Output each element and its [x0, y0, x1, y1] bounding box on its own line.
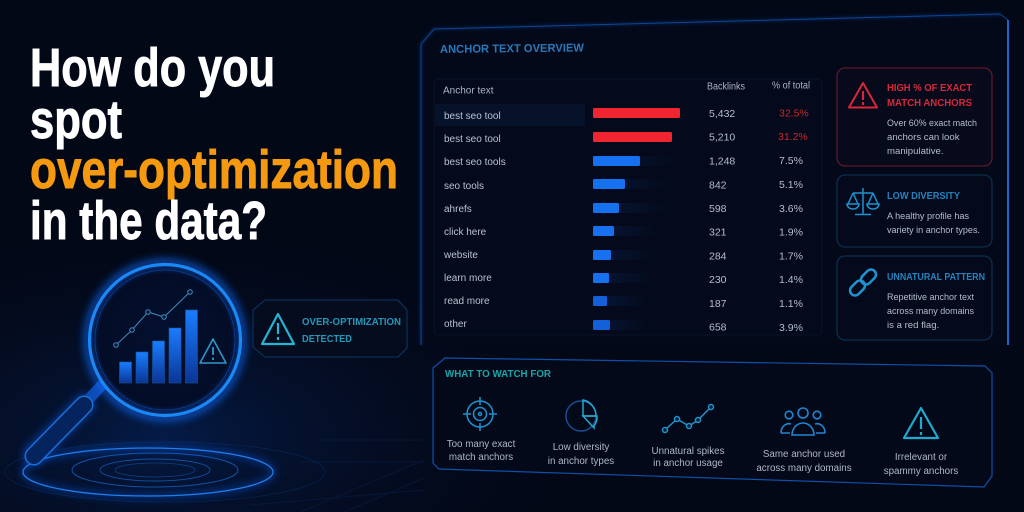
callout: over-optimization detected [253, 300, 407, 357]
percent column: 1.7% [779, 250, 803, 262]
card: high percent of exact match anchors: Over 60% exact match [887, 118, 977, 129]
callout: over-optimization detected: OVER-OPTIMIZATION [302, 316, 401, 328]
table header [443, 80, 810, 96]
item: irrelevant or spammy anchors: Irrelevant or [895, 452, 948, 463]
backlinks column: 658 [709, 322, 727, 334]
backlinks column: 321 [709, 226, 727, 238]
item: low diversity in anchor types [548, 400, 614, 467]
lens warning icon [200, 339, 226, 363]
lens trend line [114, 290, 192, 347]
item: low diversity in anchor types: in anchor types [548, 456, 614, 467]
icon: concentric floor rings [5, 442, 325, 502]
item: irrelevant or spammy anchors [884, 408, 958, 477]
card: unnatural pattern [837, 256, 992, 340]
lens bar chart [120, 310, 198, 383]
card: unnatural pattern: across many domains [887, 306, 974, 317]
card: low diversity: A healthy profile has [887, 211, 969, 222]
card: unnatural pattern: UNNATURAL PATTERN [887, 271, 985, 283]
percent column: 7.5% [779, 155, 803, 167]
item: unnatural spikes in anchor usage [652, 404, 725, 469]
icon: trend line [662, 404, 714, 432]
card: high percent of exact match anchors [837, 68, 992, 166]
item: too many exact match anchors: Too many exact [447, 439, 516, 450]
anchor labels: best seo tool [444, 134, 501, 145]
panel: what to watch for [433, 358, 992, 487]
backlinks column: 284 [709, 250, 727, 262]
card: low diversity [837, 175, 992, 247]
callout: over-optimization detected: DETECTED [302, 333, 352, 345]
percent column: 1.9% [779, 226, 803, 238]
heading: anchor text overview: ANCHOR TEXT OVERVIEW [440, 42, 584, 56]
card: high percent of exact match anchors: MATCH ANCHORS [887, 97, 972, 109]
icon: warning [904, 408, 938, 438]
percent column [778, 108, 809, 334]
title: over-optimization [30, 140, 398, 200]
anchor labels: ahrefs [444, 204, 472, 215]
bar chart [593, 108, 680, 330]
card: high percent of exact match anchors: HIGH % OF EXACT [887, 82, 973, 94]
item: unnatural spikes in anchor usage: in anchor usage [653, 458, 723, 469]
percent column: 3.6% [779, 203, 803, 215]
icon: people [781, 408, 825, 435]
handle [33, 384, 103, 456]
icon: pie chart [566, 400, 597, 431]
anchor labels: other [444, 319, 467, 330]
title [30, 38, 398, 251]
percent column: 5.1% [779, 179, 803, 191]
item: too many exact match anchors [447, 397, 516, 463]
backlinks column: 187 [709, 298, 727, 310]
panel: anchor table [434, 79, 822, 335]
anchor labels [443, 111, 506, 330]
item: same anchor used across many domains: Same anchor used [763, 449, 845, 460]
item: same anchor used across many domains [756, 408, 852, 474]
item: too many exact match anchors: match anchors [449, 452, 513, 463]
anchor labels: website [443, 250, 478, 261]
backlinks column: 5,210 [709, 132, 735, 144]
card: unnatural pattern: is a red flag. [887, 320, 939, 331]
backlinks column: 842 [709, 180, 727, 192]
title: in the data? [30, 191, 267, 251]
backlinks column [709, 108, 735, 334]
item: low diversity in anchor types: Low diversity [553, 442, 609, 453]
backlinks column: 5,432 [709, 108, 735, 120]
icon: red warning [849, 83, 877, 108]
heading: what to watch for: WHAT TO WATCH FOR [445, 368, 551, 380]
card: high percent of exact match anchors: anchors can look [887, 132, 960, 143]
lens [87, 262, 243, 418]
item: irrelevant or spammy anchors: spammy anchors [884, 466, 958, 477]
backlinks column: 1,248 [709, 156, 735, 168]
percent column: 1.1% [779, 298, 803, 310]
icon: chain link [848, 267, 878, 298]
title: spot [30, 90, 122, 150]
card: unnatural pattern: Repetitive anchor text [887, 292, 974, 303]
anchor labels: best seo tool [444, 111, 501, 122]
percent column: 32.5% [779, 108, 809, 120]
card: low diversity: variety in anchor types. [887, 225, 980, 236]
icon: target [463, 397, 497, 431]
icon: magnifying glass with chart [33, 262, 243, 456]
anchor labels: click here [444, 227, 487, 238]
item: unnatural spikes in anchor usage: Unnatural spikes [652, 446, 725, 457]
anchor labels: best seo tools [444, 157, 506, 168]
icon: scales [847, 188, 879, 214]
table header: Anchor text [443, 86, 494, 96]
table header: Backlinks [707, 82, 745, 92]
icon: warning [262, 314, 294, 344]
percent column: 3.9% [779, 322, 803, 334]
backlinks column: 598 [709, 203, 727, 215]
title: How do you [30, 38, 275, 98]
item: same anchor used across many domains: across many domains [756, 463, 852, 474]
table header: % of total [772, 80, 810, 92]
backlinks column: 230 [709, 274, 727, 286]
percent column: 31.2% [778, 131, 808, 143]
panel: dashboard frame [421, 14, 1008, 345]
anchor labels: learn more [444, 273, 492, 284]
percent column: 1.4% [779, 274, 803, 286]
card: low diversity: LOW DIVERSITY [887, 190, 960, 202]
anchor labels: read more [444, 296, 490, 307]
anchor labels: seo tools [444, 181, 484, 192]
card: high percent of exact match anchors: manipulative. [887, 146, 944, 157]
